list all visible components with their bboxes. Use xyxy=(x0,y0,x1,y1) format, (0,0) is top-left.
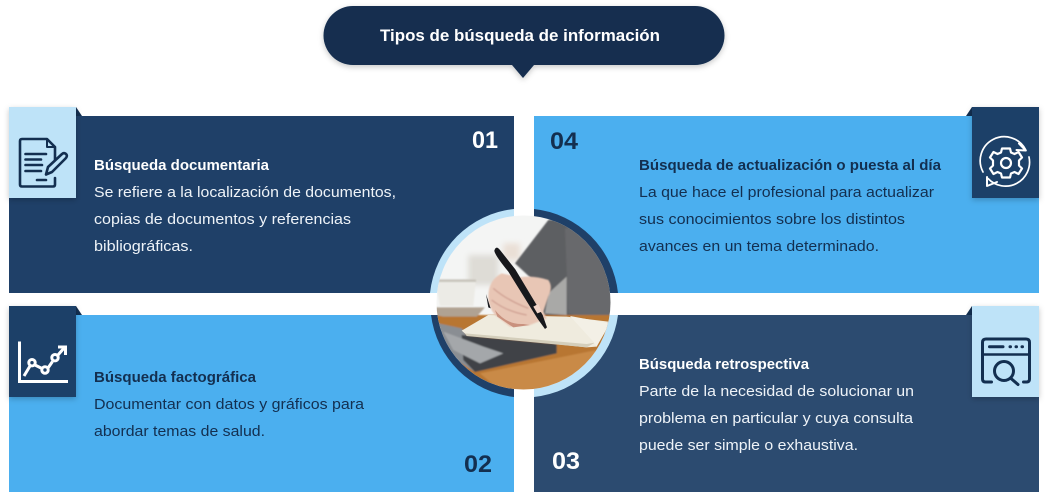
text block: retrospectiva description: Parte de la necesidad de solucionar un xyxy=(639,383,914,400)
text block: retrospectiva description xyxy=(639,383,914,454)
text block: factográfica description xyxy=(94,396,365,440)
text block: factográfica description: Documentar con datos y gráficos para xyxy=(94,396,365,413)
text block: actualización description: avances en un tema determinado. xyxy=(639,238,879,255)
text block: documentaria description xyxy=(94,184,396,255)
icon: document with pen xyxy=(9,107,82,198)
text block: actualización description: La que hace el profesional para actualizar xyxy=(639,184,934,201)
panel: 02 búsqueda factográfica xyxy=(9,315,514,492)
number 03: 03 xyxy=(552,448,580,475)
icon: rising line chart xyxy=(9,306,82,397)
center photo with ring xyxy=(430,209,620,397)
title pill xyxy=(324,6,724,78)
text block: documentaria description: bibliográficas. xyxy=(94,238,193,255)
title: Tipos de búsqueda de información xyxy=(380,26,660,45)
text block: factográfica description: abordar temas de salud. xyxy=(94,423,265,440)
photo: hand writing in a notebook xyxy=(436,216,610,390)
text block: documentaria description: copias de documentos y referencias xyxy=(94,211,351,228)
text block: retrospectiva description: problema en particular y cuya consulta xyxy=(639,410,914,427)
panel: 01 búsqueda documentaria xyxy=(9,116,514,293)
text block: retrospectiva description: puede ser simple o exhaustiva. xyxy=(639,437,858,454)
heading: búsqueda de actualización: Búsqueda de actualización o puesta al día xyxy=(639,157,942,174)
panel: 04 búsqueda de actualización xyxy=(534,116,1039,293)
heading: búsqueda retrospectiva: Búsqueda retrospectiva xyxy=(639,356,810,373)
text block: documentaria description: Se refiere a la localización de documentos, xyxy=(94,184,396,201)
number 04: 04 xyxy=(550,128,579,155)
text block: actualización description xyxy=(639,184,934,255)
heading: búsqueda factográfica: Búsqueda factográfica xyxy=(94,369,257,386)
heading: búsqueda documentaria: Búsqueda documentaria xyxy=(94,157,270,174)
icon: gear with circular arrows xyxy=(966,107,1039,198)
panel: 03 búsqueda retrospectiva xyxy=(534,315,1039,492)
number 02: 02 xyxy=(464,451,492,478)
icon: browser window with magnifier xyxy=(966,306,1039,397)
text block: actualización description: sus conocimientos sobre los distintos xyxy=(639,211,905,228)
ring: four coloured arcs xyxy=(430,209,618,397)
number 01: 01 xyxy=(472,127,498,154)
